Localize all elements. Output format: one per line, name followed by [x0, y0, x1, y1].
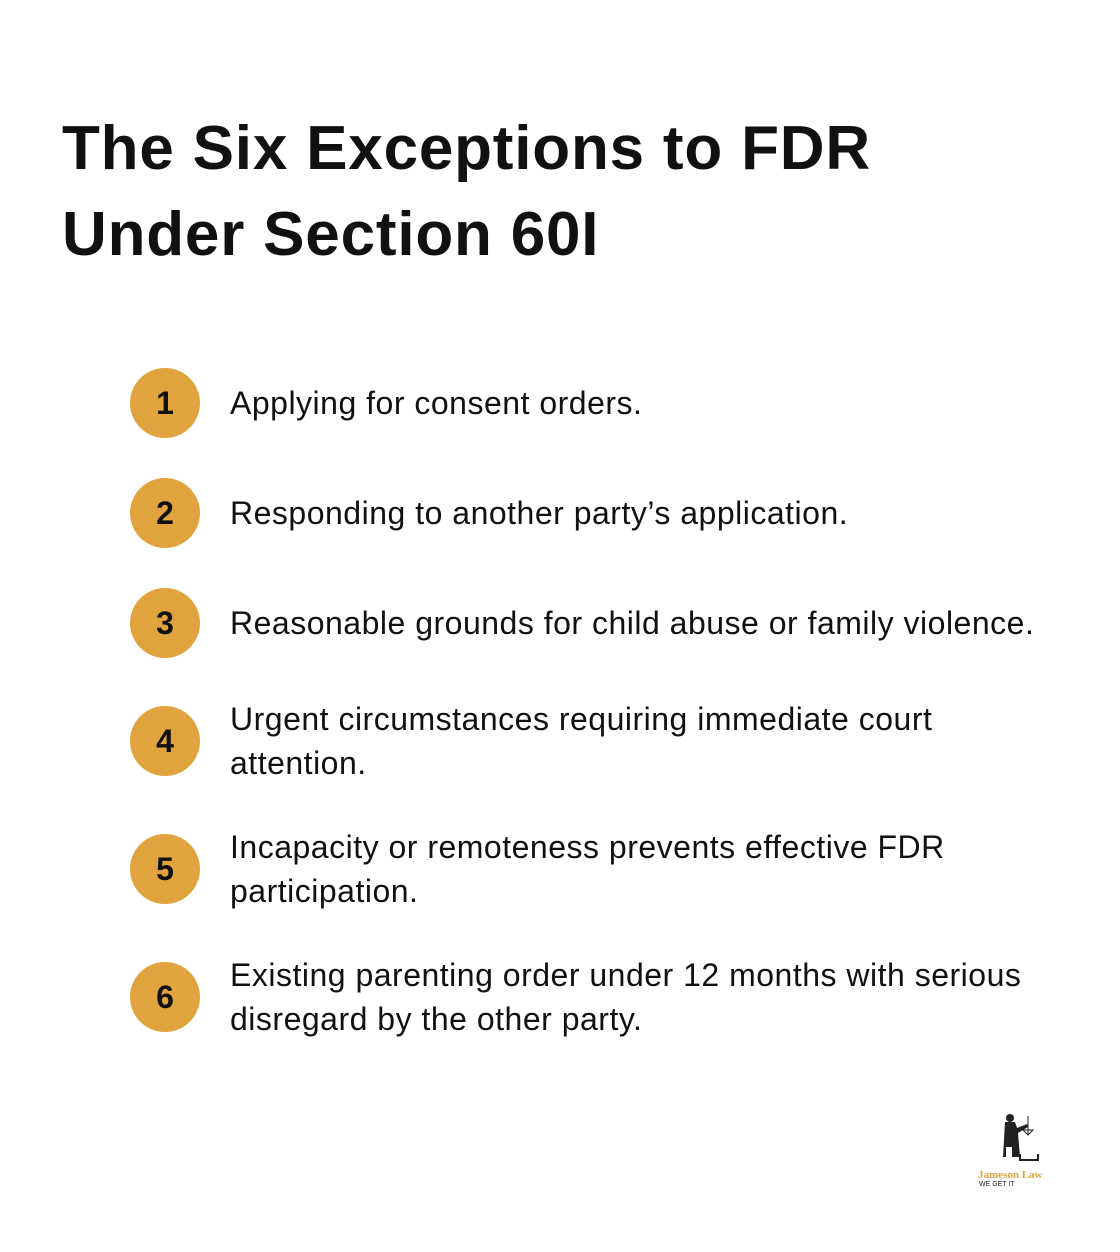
title: Under Section 60I — [62, 200, 599, 269]
item 2: Responding to another party’s application. — [230, 495, 848, 531]
item 3: 3 — [156, 605, 174, 641]
title — [62, 114, 871, 269]
item 5: Incapacity or remoteness prevents effective FDR — [230, 829, 945, 865]
item 4: Urgent circumstances requiring immediate court — [230, 701, 932, 737]
item 1: Applying for consent orders. — [230, 385, 642, 421]
item 6 — [130, 957, 1021, 1037]
item 4: 4 — [156, 723, 174, 759]
logo: WE GET IT — [979, 1181, 1015, 1188]
item 5: 5 — [156, 851, 174, 887]
item 1 — [130, 368, 642, 438]
item 4 — [130, 701, 932, 781]
logo — [978, 1114, 1042, 1188]
item 3 — [130, 588, 1034, 658]
item 2: 2 — [156, 495, 174, 531]
item 3: Reasonable grounds for child abuse or family violence. — [230, 605, 1034, 641]
title: The Six Exceptions to FDR — [62, 114, 871, 183]
item 6: disregard by the other party. — [230, 1001, 642, 1037]
item 6: Existing parenting order under 12 months with serious — [230, 957, 1021, 993]
item 6: 6 — [156, 979, 174, 1015]
item 5: participation. — [230, 873, 418, 909]
item 4: attention. — [230, 745, 367, 781]
item 1: 1 — [156, 385, 174, 421]
logo: Jameson Law — [978, 1169, 1042, 1181]
item 5 — [130, 829, 945, 909]
item 2 — [130, 478, 848, 548]
